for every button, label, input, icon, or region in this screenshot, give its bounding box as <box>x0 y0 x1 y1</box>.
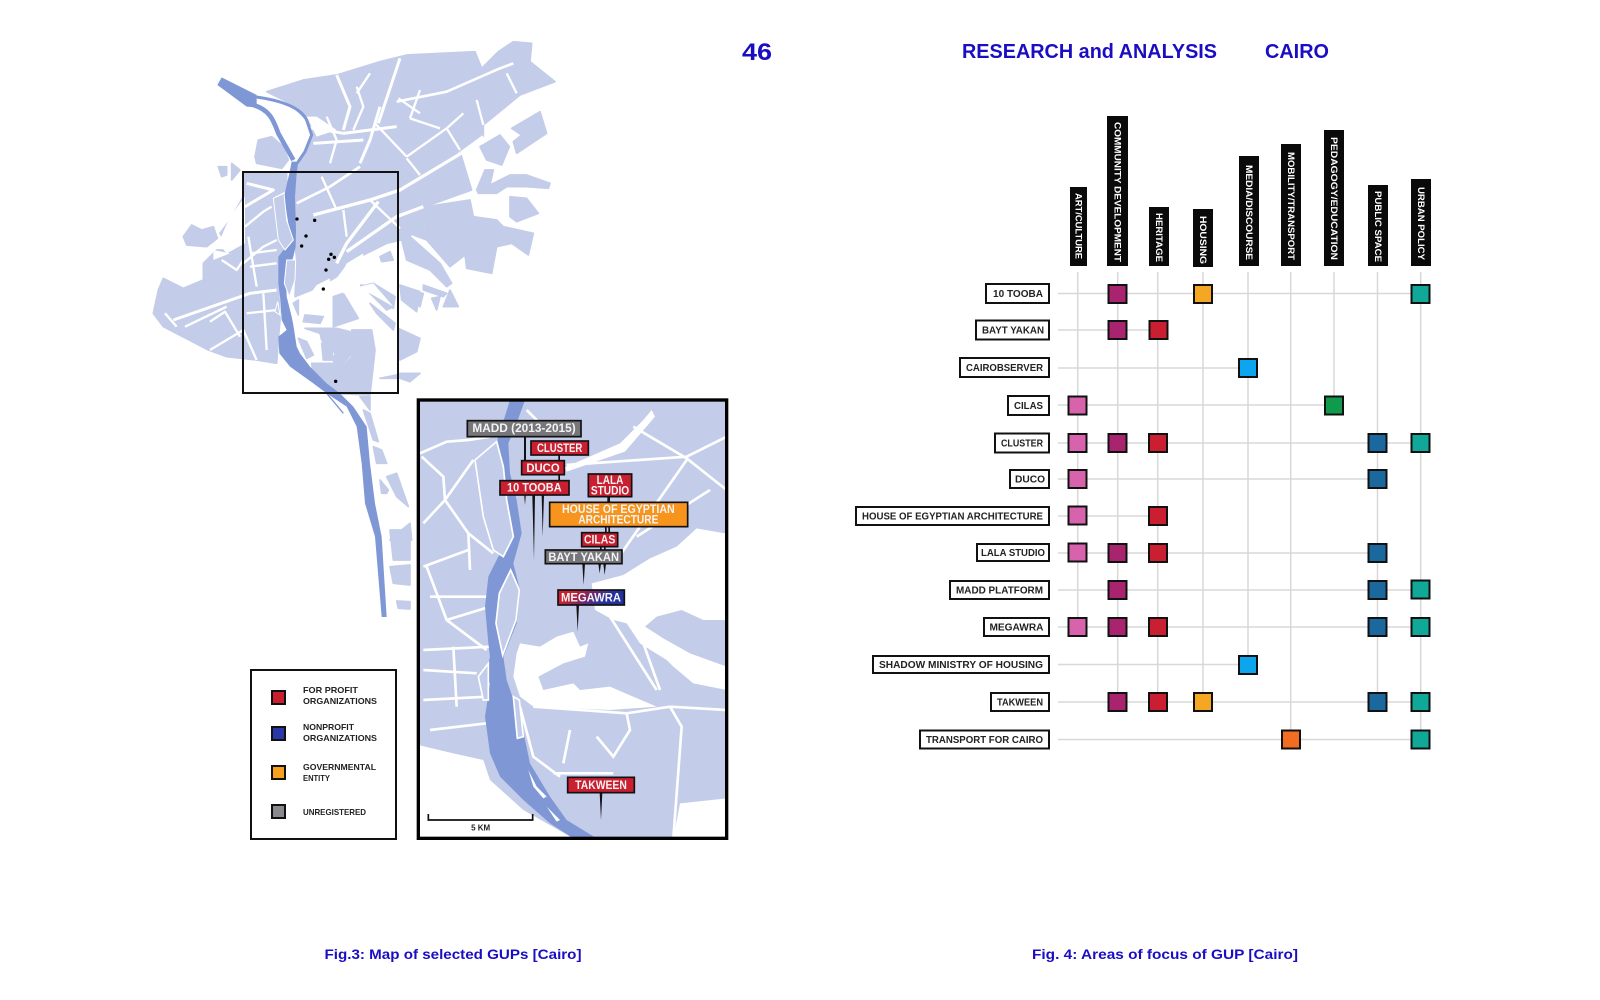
column: urban policy: URBAN POLICY <box>1416 187 1426 260</box>
map: extent rectangle <box>243 172 398 393</box>
caption: figure 3: Fig.3: Map of selected GUPs [Cairo] <box>324 946 582 962</box>
row: Bayt Yakan: BAYT YAKAN <box>982 326 1044 336</box>
legend: for profit <box>272 685 377 706</box>
row: MADD Platform: MADD PLATFORM <box>956 586 1043 596</box>
column: media/discourse <box>1239 156 1259 266</box>
column: heritage <box>1149 207 1169 266</box>
column: media/discourse: MEDIA/DISCOURSE <box>1244 165 1254 260</box>
Nile river <box>217 77 387 617</box>
column headers <box>1070 116 1431 267</box>
grid lines <box>1058 272 1421 740</box>
row: Megawra: MEGAWRA <box>990 622 1044 634</box>
row: Cairobserver: CAIROBSERVER <box>966 363 1044 374</box>
label: DUCO: DUCO <box>526 462 560 475</box>
legend: governmental: ENTITY <box>303 773 330 783</box>
row: Shadow Ministry of Housing <box>873 656 1257 674</box>
column: mobility/transport <box>1281 144 1301 266</box>
header city: CAIRO <box>1265 41 1329 63</box>
column: public space <box>1368 185 1388 266</box>
caption: figure 4: Fig. 4: Areas of focus of GUP [Cairo] <box>1032 946 1298 962</box>
column: mobility/transport: MOBILITY/TRANSPORT <box>1286 152 1296 261</box>
scale bar <box>428 814 533 833</box>
panel: map legend <box>251 670 396 839</box>
column: art/culture: ART/CULTURE <box>1073 193 1083 259</box>
label: House of Egyptian Architecture: HOUSE OF EGYPTIAN <box>562 503 675 516</box>
row: Takween: TAKWEEN <box>997 698 1043 708</box>
row: CILAS <box>1008 396 1343 415</box>
chart: areas of focus matrix <box>856 116 1431 748</box>
column: community development <box>1107 116 1128 266</box>
row: Cairobserver <box>960 358 1257 377</box>
row: Lala Studio: LALA STUDIO <box>981 548 1045 559</box>
label: 10 TOOBA: 10 TOOBA <box>507 482 562 495</box>
column: pedagogy/education <box>1324 130 1344 266</box>
label: TAKWEEN: TAKWEEN <box>575 779 627 792</box>
row: Bayt Yakan <box>976 320 1168 340</box>
legend: nonprofit: ORGANIZATIONS <box>303 733 377 743</box>
legend: nonprofit: NONPROFIT <box>303 722 355 732</box>
row: Duco: DUCO <box>1015 474 1045 486</box>
row: House of Egyptian Architecture <box>856 506 1167 525</box>
row: MADD Platform <box>950 580 1430 599</box>
row: Transport for Cairo: TRANSPORT FOR CAIRO <box>926 735 1043 746</box>
panel: inset map <box>418 400 727 838</box>
white gaps in built area <box>213 117 393 307</box>
row: Takween <box>991 693 1430 711</box>
legend: unregistered: UNREGISTERED <box>303 807 366 817</box>
road network <box>165 58 517 360</box>
inset frame <box>418 400 727 838</box>
label: MADD: MADD (2013-2015) <box>472 422 576 435</box>
legend: governmental: GOVERNMENTAL <box>303 762 376 772</box>
label: House of Egyptian Architecture: ARCHITECTURE <box>578 514 659 527</box>
label: MEGAWRA: MEGAWRA <box>561 592 622 605</box>
column: art/culture <box>1070 187 1087 266</box>
row: Duco <box>1010 470 1386 488</box>
selected GUP location dots <box>295 217 337 383</box>
legend: for profit: ORGANIZATIONS <box>303 696 377 706</box>
legend: unregistered <box>272 805 366 818</box>
row: 10 Tooba: 10 TOOBA <box>993 289 1043 300</box>
row: 10 Tooba <box>986 284 1430 303</box>
row: Cluster <box>995 434 1430 452</box>
row: Cluster: CLUSTER <box>1001 438 1044 450</box>
river islands <box>273 193 296 315</box>
map: greater Cairo overview <box>153 42 555 617</box>
legend: nonprofit <box>272 722 377 743</box>
column: housing <box>1193 209 1213 267</box>
row: CILAS: CILAS <box>1014 401 1043 412</box>
label: House of Egyptian Architecture <box>550 502 688 527</box>
inset land, roads and river <box>418 400 727 838</box>
row: Lala Studio <box>977 544 1386 562</box>
row: Shadow Ministry of Housing: SHADOW MINISTRY OF HOUSING <box>879 660 1043 671</box>
scale bar: 5 KM <box>471 824 491 833</box>
column: public space: PUBLIC SPACE <box>1373 191 1383 262</box>
row: Megawra <box>984 618 1430 636</box>
legend: governmental <box>272 762 376 783</box>
label: LALA STUDIO: STUDIO <box>591 484 629 497</box>
label: CILAS: CILAS <box>584 534 616 547</box>
label: BAYT YAKAN: BAYT YAKAN <box>548 551 619 564</box>
row: House of Egyptian Architecture: HOUSE OF EGYPTIAN ARCHITECTURE <box>862 512 1043 522</box>
label: LALA STUDIO: LALA <box>597 474 624 487</box>
column: urban policy <box>1411 179 1431 266</box>
label: LALA STUDIO <box>588 474 632 497</box>
pin stems <box>524 437 610 820</box>
column: heritage: HERITAGE <box>1154 213 1164 262</box>
column: housing: HOUSING <box>1198 216 1208 264</box>
land parcels <box>153 42 555 609</box>
page number: 46 <box>742 39 772 66</box>
legend: for profit: FOR PROFIT <box>303 685 359 695</box>
label: CLUSTER: CLUSTER <box>537 442 583 455</box>
header title: RESEARCH and ANALYSIS <box>962 41 1217 63</box>
column: pedagogy/education: PEDAGOGY/EDUCATION <box>1329 137 1339 260</box>
row: Transport for Cairo <box>920 730 1430 748</box>
column: community development: COMMUNITY DEVELOPMENT <box>1112 122 1122 263</box>
